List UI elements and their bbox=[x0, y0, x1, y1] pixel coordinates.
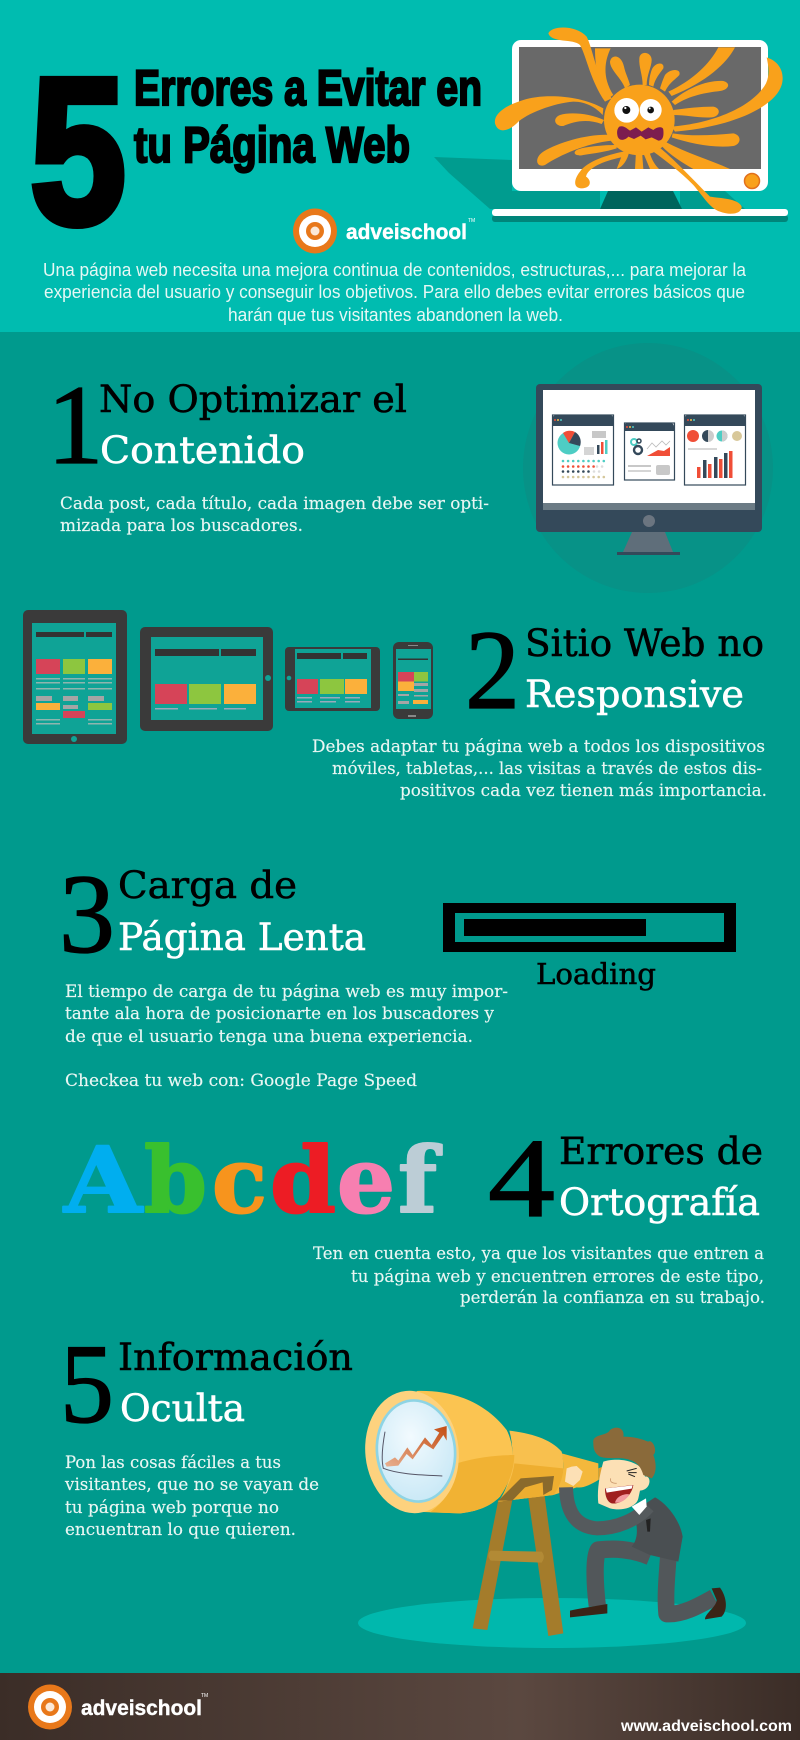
heading 4: Errores de bbox=[559, 1130, 763, 1173]
heading 5 bbox=[118, 1336, 353, 1430]
illustration: man with telescope bbox=[358, 1386, 746, 1648]
intro text: harán que tus visitantes abandonen la web. bbox=[228, 305, 563, 325]
text 5: Pon las cosas fáciles a tus bbox=[65, 1453, 281, 1473]
text 3: de que el usuario tenga una buena experiencia. bbox=[65, 1027, 473, 1047]
panel: section 2 bbox=[23, 608, 767, 801]
number 3: 3 bbox=[59, 852, 115, 977]
title bbox=[134, 60, 482, 173]
text 1: mizada para los buscadores. bbox=[60, 516, 303, 536]
heading 3: Carga de bbox=[118, 864, 297, 907]
text 5: tu página web porque no bbox=[65, 1498, 279, 1518]
phone bbox=[393, 642, 433, 719]
text 1 bbox=[60, 494, 489, 536]
text 4: perderán la confianza en su trabajo. bbox=[460, 1288, 765, 1308]
icon: colored letters bbox=[63, 1128, 443, 1234]
panel: section 1 bbox=[47, 343, 773, 593]
text 2: móviles, tabletas,... las visitas a través de estos dis- bbox=[332, 759, 762, 779]
text 3: El tiempo de carga de tu página web es muy impor- bbox=[65, 982, 508, 1002]
logo: adveischool footer bbox=[28, 1684, 208, 1730]
website url: www.adveischool.com bbox=[620, 1718, 792, 1735]
small tablet bbox=[285, 647, 380, 711]
icon: desktop monitor with dashboards bbox=[523, 343, 773, 593]
man bbox=[565, 1428, 726, 1619]
title: Errores a Evitar en bbox=[134, 60, 482, 116]
icon: loading bar: Loading bbox=[536, 957, 656, 991]
logo: adveischool: TM bbox=[468, 218, 475, 224]
text 5 bbox=[64, 1453, 319, 1540]
number 5: 5 bbox=[60, 1322, 114, 1447]
icon: colored letters: f bbox=[398, 1128, 443, 1234]
panel: header bbox=[0, 0, 800, 332]
heading 3: Página Lenta bbox=[118, 916, 366, 959]
icon: colored letters: c bbox=[212, 1128, 267, 1234]
number 2: 2 bbox=[465, 608, 520, 733]
heading 1 bbox=[99, 378, 407, 472]
big number 5: 5 bbox=[30, 36, 126, 268]
text 5: encuentran lo que quieren. bbox=[65, 1520, 296, 1540]
logo: adveischool bbox=[293, 208, 475, 254]
logo: adveischool footer: TM bbox=[201, 1693, 208, 1699]
intro text bbox=[43, 260, 747, 325]
heading 1: No Optimizar el bbox=[99, 378, 407, 421]
number 4: 4 bbox=[488, 1116, 555, 1241]
icon: colored letters: e bbox=[337, 1128, 395, 1234]
text 3: Checkea tu web con: Google Page Speed bbox=[65, 1071, 417, 1091]
logo: adveischool footer: adveischool bbox=[81, 1697, 202, 1720]
tablet landscape bbox=[140, 627, 273, 731]
text 2 bbox=[312, 737, 767, 801]
heading 2 bbox=[525, 622, 764, 716]
panel: section 3 bbox=[59, 852, 736, 1091]
heading 3 bbox=[118, 864, 366, 959]
text 2: Debes adaptar tu página web a todos los dispositivos bbox=[312, 737, 765, 757]
heading 1: Contenido bbox=[100, 429, 305, 472]
icon: colored letters: d bbox=[270, 1128, 336, 1234]
panel: section 5 bbox=[60, 1322, 746, 1648]
heading 5: Información bbox=[118, 1336, 353, 1379]
icon: loading bar bbox=[443, 903, 736, 991]
heading 2: Sitio Web no bbox=[525, 622, 764, 665]
number 1: 1 bbox=[47, 363, 104, 488]
text 4: Ten en cuenta esto, ya que los visitantes que entren a bbox=[313, 1244, 764, 1264]
heading 4: Ortografía bbox=[559, 1181, 760, 1224]
heading 2: Responsive bbox=[525, 673, 744, 716]
intro text: Una página web necesita una mejora continua de contenidos, estructuras,... para mejorar la bbox=[43, 260, 747, 280]
text 2: positivos cada vez tienen más importancia. bbox=[400, 781, 767, 801]
tripod bbox=[473, 1482, 563, 1636]
logo: adveischool: adveischool bbox=[346, 221, 467, 244]
icon: monitor with orange splat bbox=[434, 27, 788, 222]
telescope bbox=[359, 1386, 616, 1518]
icon: colored letters: A bbox=[63, 1128, 144, 1234]
intro text: experiencia del usuario y conseguir los objetivos. Para ello debes evitar errores básicos que bbox=[44, 282, 745, 302]
heading 4 bbox=[559, 1130, 763, 1224]
text 4 bbox=[313, 1244, 765, 1308]
panel: section 4 bbox=[63, 1116, 765, 1308]
icon: responsive devices bbox=[23, 610, 433, 744]
text 4: tu página web y encuentren errores de este tipo, bbox=[351, 1267, 764, 1287]
icon: colored letters: b bbox=[144, 1128, 207, 1234]
text 1: Cada post, cada título, cada imagen debe ser opti- bbox=[60, 494, 489, 514]
tablet portrait bbox=[23, 610, 127, 744]
text 3 bbox=[65, 982, 508, 1091]
text 3: tante ala hora de posicionarte en los buscadores y bbox=[65, 1004, 494, 1024]
heading 5: Oculta bbox=[120, 1387, 245, 1430]
panel: footer bbox=[0, 1673, 800, 1740]
text 5: visitantes, que no se vayan de bbox=[64, 1475, 319, 1495]
title: tu Página Web bbox=[134, 117, 410, 173]
